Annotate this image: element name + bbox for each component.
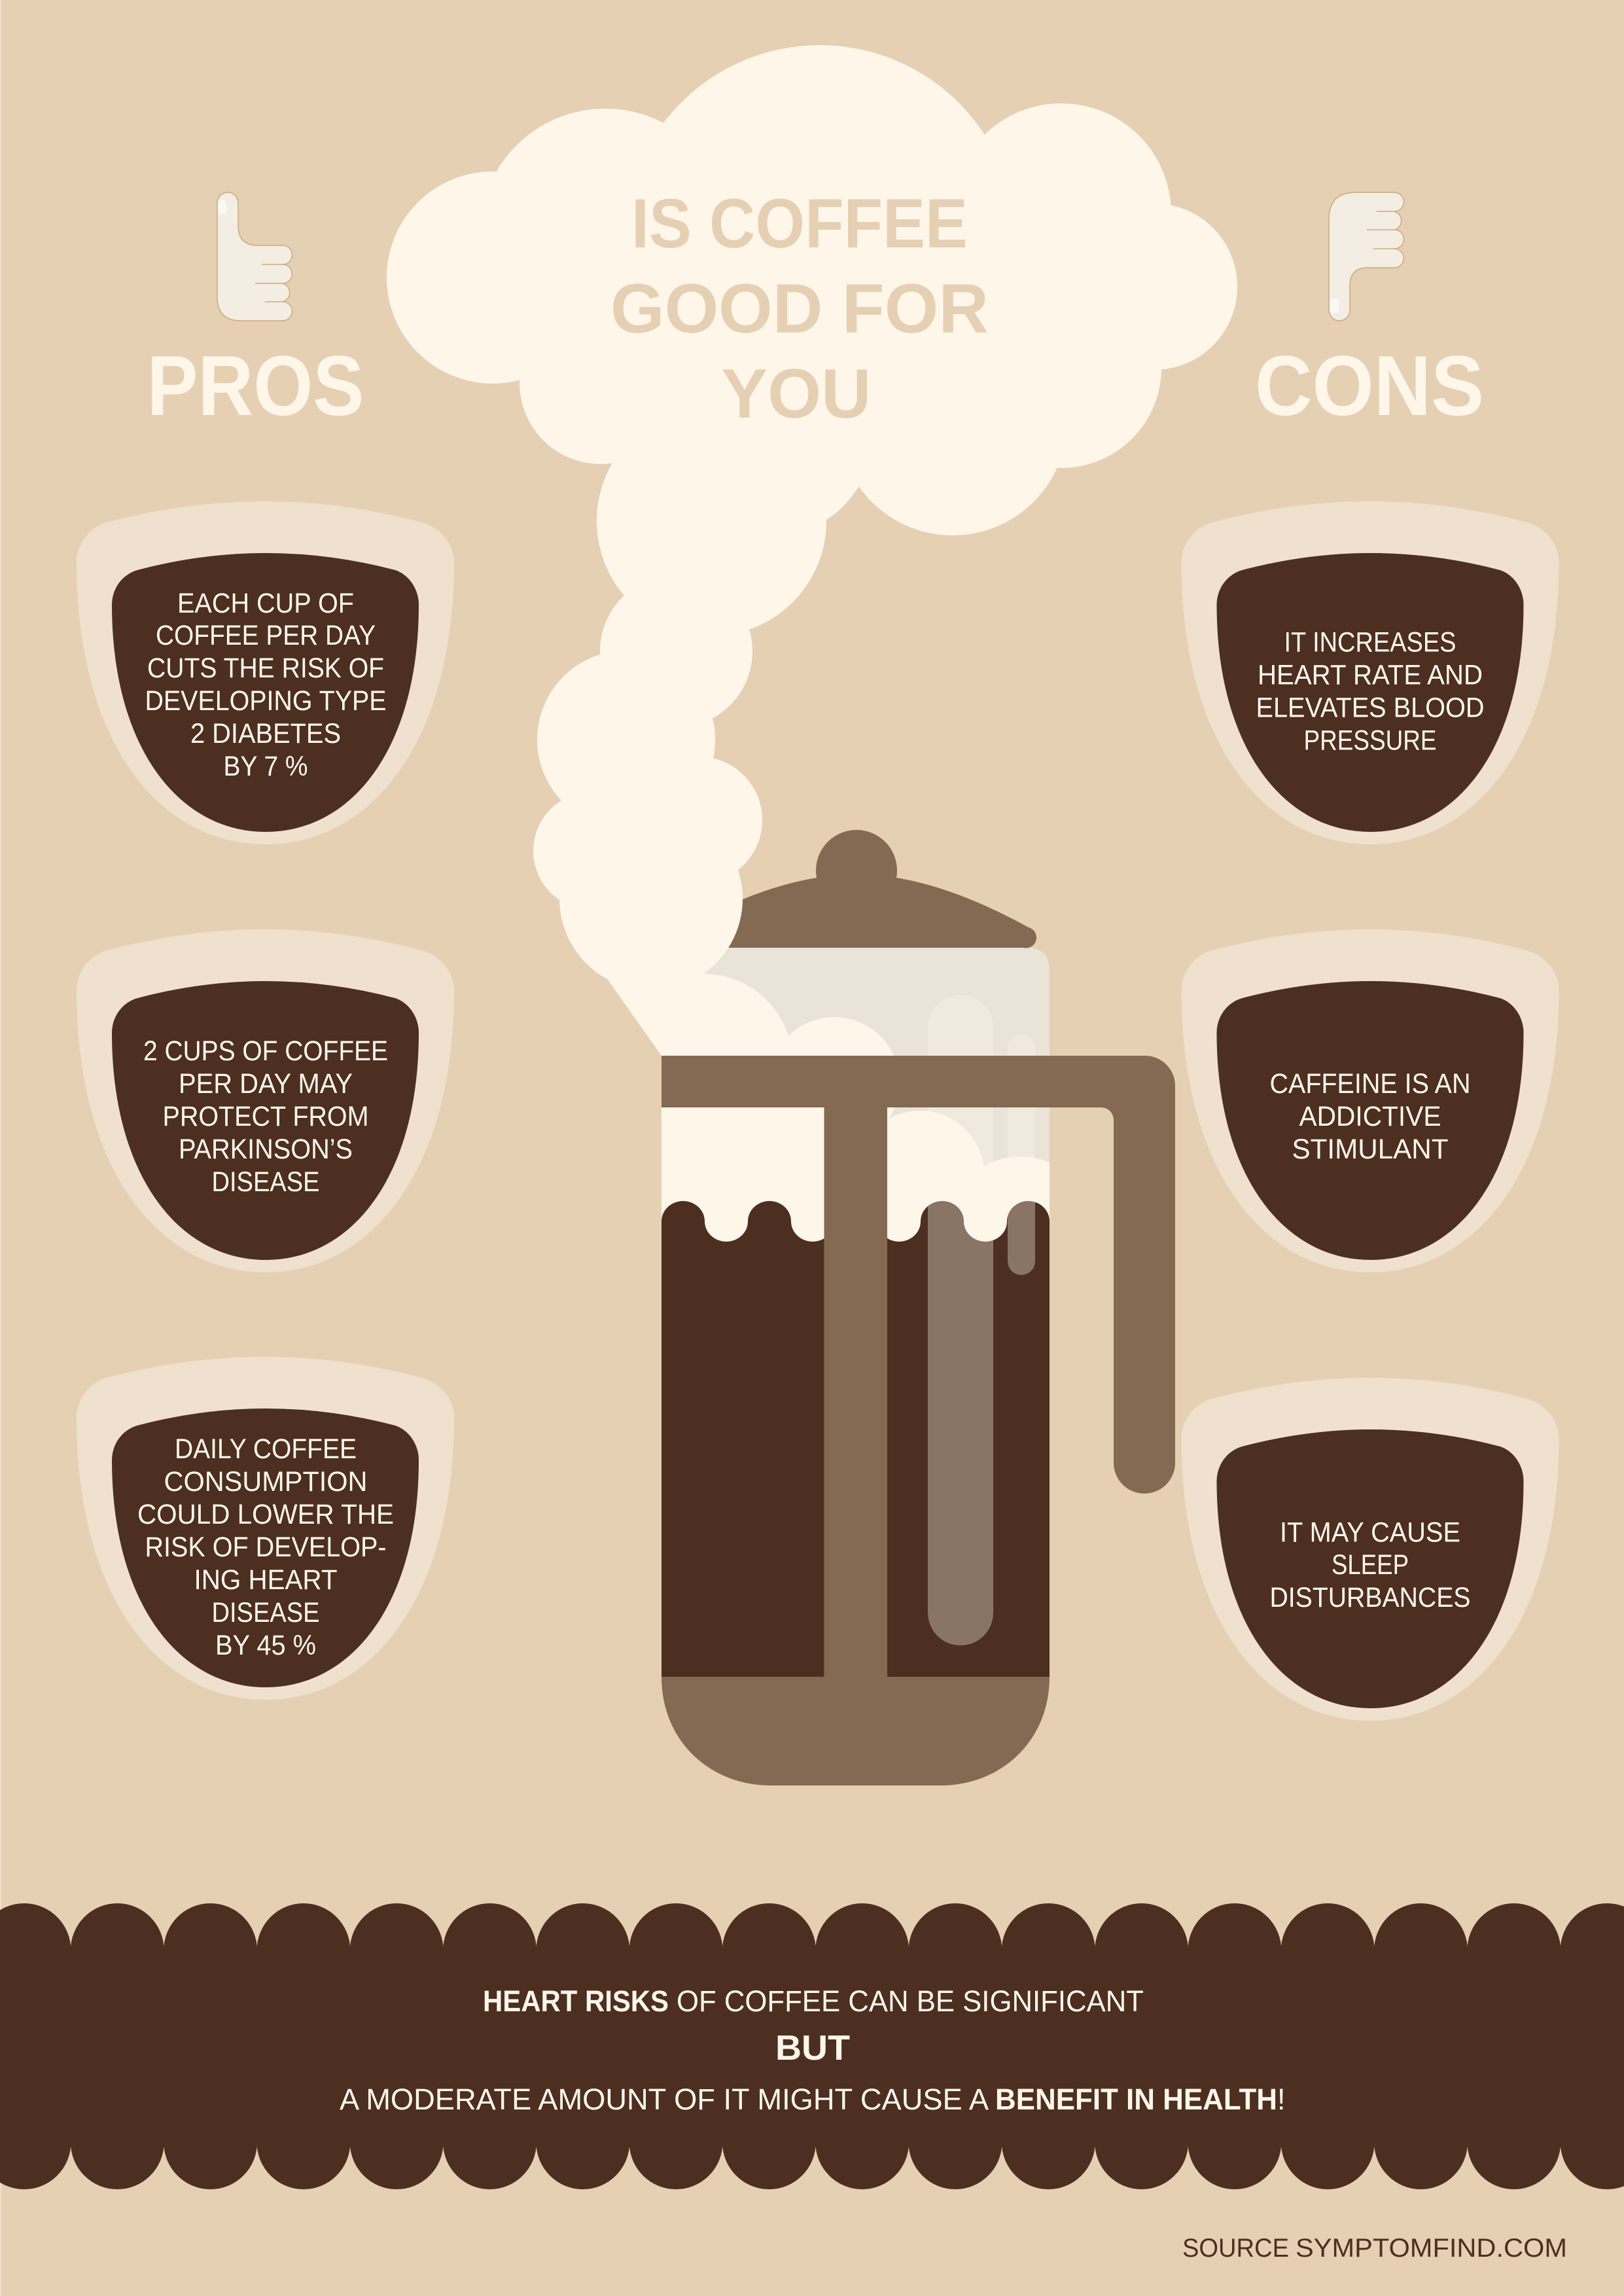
pro 3 text bbox=[137, 1433, 394, 1661]
icon: thumbs up bbox=[217, 192, 292, 321]
pro 3 text: DISEASE bbox=[212, 1597, 319, 1628]
pro 1 text: EACH CUP OF bbox=[177, 588, 354, 619]
con 3 text bbox=[1269, 1517, 1471, 1613]
heading: cons: CONS bbox=[1255, 338, 1484, 433]
handle and collar bbox=[662, 1056, 1175, 1494]
pro 1 text: DEVELOPING TYPE bbox=[145, 685, 386, 717]
pro 2 text: 2 CUPS OF COFFEE bbox=[143, 1035, 388, 1067]
title bbox=[610, 184, 989, 433]
icon: thumbs down bbox=[1329, 192, 1404, 321]
pro 1 text: 2 DIABETES bbox=[190, 718, 341, 749]
scalloped banner bbox=[0, 1903, 1624, 2189]
pro 2 text: PROTECT FROM bbox=[162, 1101, 369, 1132]
banner text: A MODERATE AMOUNT OF IT MIGHT CAUSE A bbox=[340, 2083, 989, 2116]
banner text: ! bbox=[1277, 2083, 1286, 2116]
banner text: OF COFFEE CAN BE SIGNIFICANT bbox=[677, 1984, 1144, 2018]
pro 3 text: DAILY COFFEE bbox=[175, 1433, 357, 1465]
source credit: SYMPTOMFIND.COM bbox=[1296, 2234, 1567, 2263]
con 3 text: DISTURBANCES bbox=[1269, 1582, 1471, 1613]
pro 3 text: CONSUMPTION bbox=[164, 1466, 368, 1498]
panel: pro 3 bbox=[77, 1357, 454, 1700]
pro 3 text: ING HEART bbox=[194, 1564, 338, 1596]
panel: pro 2 bbox=[77, 929, 454, 1272]
pro 2 text: PARKINSON’S bbox=[179, 1134, 353, 1165]
pro 3 text: RISK OF DEVELOP- bbox=[145, 1532, 386, 1563]
title: YOU bbox=[721, 354, 872, 433]
pro 3 text: BY 45 % bbox=[215, 1630, 316, 1661]
pro 1 text: CUTS THE RISK OF bbox=[147, 653, 384, 684]
banner text: HEART RISKS bbox=[483, 1984, 669, 2018]
plunger rod bbox=[824, 1107, 887, 1696]
pro 1 text: BY 7 % bbox=[224, 751, 308, 782]
base bbox=[662, 1677, 1050, 1785]
con 2 text bbox=[1269, 1068, 1471, 1165]
glass carafe bbox=[662, 948, 1050, 1244]
panel: con 1 bbox=[1182, 501, 1559, 844]
heading: pros: PROS bbox=[147, 338, 364, 433]
pro 1 text bbox=[145, 588, 386, 782]
banner text bbox=[340, 1984, 1286, 2116]
con 1 text: PRESSURE bbox=[1303, 725, 1437, 757]
foam inside carafe bbox=[662, 974, 1050, 1242]
pro 2 text: PER DAY MAY bbox=[179, 1068, 353, 1100]
panel: pro 1 bbox=[77, 501, 454, 844]
con 2 text: CAFFEINE IS AN bbox=[1269, 1068, 1471, 1100]
french press bbox=[616, 830, 1175, 1785]
pro 1 text: COFFEE PER DAY bbox=[156, 620, 376, 651]
con 1 text: IT INCREASES bbox=[1284, 627, 1456, 658]
con 1 text: HEART RATE AND bbox=[1258, 660, 1483, 691]
pro 2 text: DISEASE bbox=[212, 1166, 319, 1198]
title: IS COFFEE bbox=[631, 184, 968, 262]
pro 2 text bbox=[143, 1035, 388, 1198]
con 2 text: ADDICTIVE bbox=[1299, 1101, 1441, 1132]
con 1 text: ELEVATES BLOOD bbox=[1256, 692, 1484, 724]
con 1 text bbox=[1256, 627, 1484, 757]
panel: con 2 bbox=[1182, 929, 1559, 1272]
coffee bbox=[662, 1201, 1050, 1677]
title: GOOD FOR bbox=[610, 269, 989, 348]
glass highlights bbox=[928, 995, 1035, 1645]
lid bbox=[677, 830, 1036, 948]
banner text: BUT bbox=[775, 2028, 850, 2068]
con 2 text: STIMULANT bbox=[1292, 1134, 1449, 1165]
pro 3 text: COULD LOWER THE bbox=[137, 1499, 394, 1530]
banner text: BENEFIT IN HEALTH bbox=[995, 2083, 1277, 2116]
source credit: SOURCE bbox=[1182, 2234, 1289, 2263]
con 3 text: IT MAY CAUSE bbox=[1280, 1517, 1460, 1549]
steam cloud bbox=[387, 45, 1237, 1056]
con 3 text: SLEEP bbox=[1332, 1549, 1409, 1581]
source credit bbox=[1182, 2234, 1567, 2263]
panel: con 3 bbox=[1182, 1378, 1559, 1721]
